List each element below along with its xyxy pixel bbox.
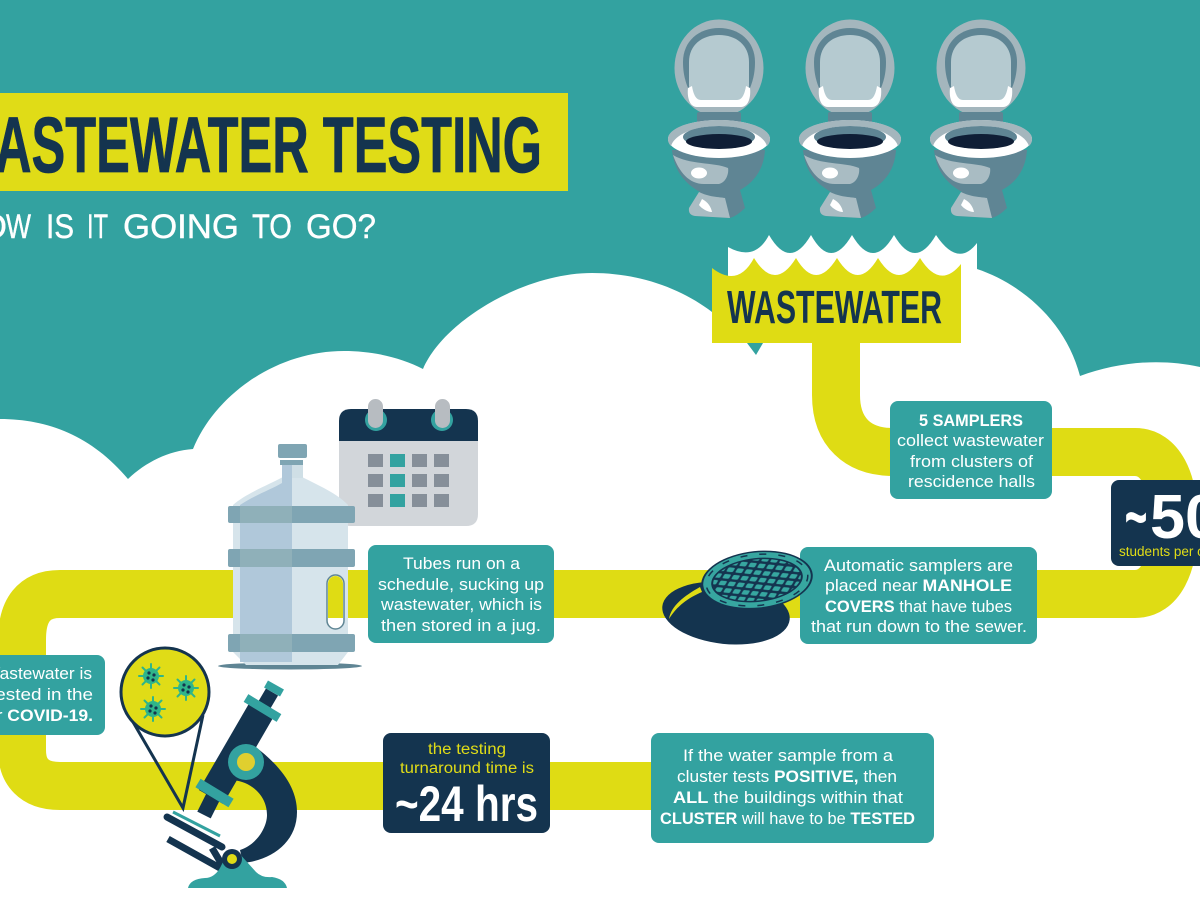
wastewater sign — [712, 258, 961, 343]
subtitle: TO — [252, 208, 292, 246]
subtitle — [0, 208, 376, 246]
step: tubes: then stored in a jug. — [381, 616, 541, 635]
stat: turnaround time: the testing — [428, 741, 506, 758]
subtitle: IT — [87, 208, 108, 246]
step: automatic samplers: that run down to the sewer. — [811, 617, 1027, 636]
microscope body — [230, 745, 297, 863]
icon: calendar — [339, 399, 478, 526]
step: tubes: wastewater, which is — [380, 595, 542, 614]
subtitle: IS — [46, 208, 74, 246]
step: positive result: CLUSTER will have to be TESTED — [660, 809, 915, 828]
step: positive result: If the water sample from a — [683, 746, 894, 765]
step: 5 samplers: 5 SAMPLERS — [919, 411, 1023, 430]
icon: water jug — [218, 444, 362, 670]
step: automatic samplers: placed near MANHOLE — [825, 576, 1012, 595]
yellow sewer pipe — [22, 340, 1174, 786]
icon: manhole cover — [659, 545, 816, 651]
step: 5 samplers: from clusters of — [910, 452, 1033, 471]
sign pointer — [747, 343, 763, 355]
icon: toilet 2 — [799, 20, 901, 218]
subtitle: GO? — [306, 208, 376, 246]
icon: toilet 1 — [668, 20, 770, 218]
step: tubes: schedule, sucking up — [378, 575, 544, 594]
white cloud — [0, 269, 1200, 900]
icon: toilet 3 — [930, 20, 1032, 218]
step: positive result — [651, 733, 934, 843]
stat: students per cluster: ~ — [1125, 483, 1147, 552]
step: tubes — [368, 545, 554, 643]
stat: turnaround time — [383, 733, 550, 833]
stat: students per cluster — [1111, 480, 1200, 566]
title banner — [0, 93, 568, 191]
step: automatic samplers — [800, 547, 1037, 644]
white water wave — [728, 235, 977, 300]
step: 5 samplers — [890, 401, 1052, 499]
step: tubes: Tubes run on a — [403, 554, 521, 573]
step: 5 samplers: collect wastewater — [897, 431, 1044, 450]
subtitle: GOING — [123, 208, 239, 246]
icon: microscope — [121, 648, 297, 888]
step: 5 samplers: rescidence halls — [908, 472, 1035, 491]
subtitle: W — [6, 208, 31, 246]
sign label: WASTEWATER — [727, 281, 942, 333]
stat: turnaround time: ~24 hrs — [395, 776, 538, 832]
step: automatic samplers: Automatic samplers are — [824, 556, 1013, 575]
step: positive result: ALL the buildings within that — [673, 788, 903, 807]
step: automatic samplers: COVERS that have tubes — [825, 597, 1012, 616]
step: lab test — [0, 655, 105, 735]
stat: turnaround time: turnaround time is — [400, 760, 534, 777]
step: positive result: cluster tests POSITIVE, then — [677, 767, 897, 786]
magnified sample — [121, 648, 209, 808]
